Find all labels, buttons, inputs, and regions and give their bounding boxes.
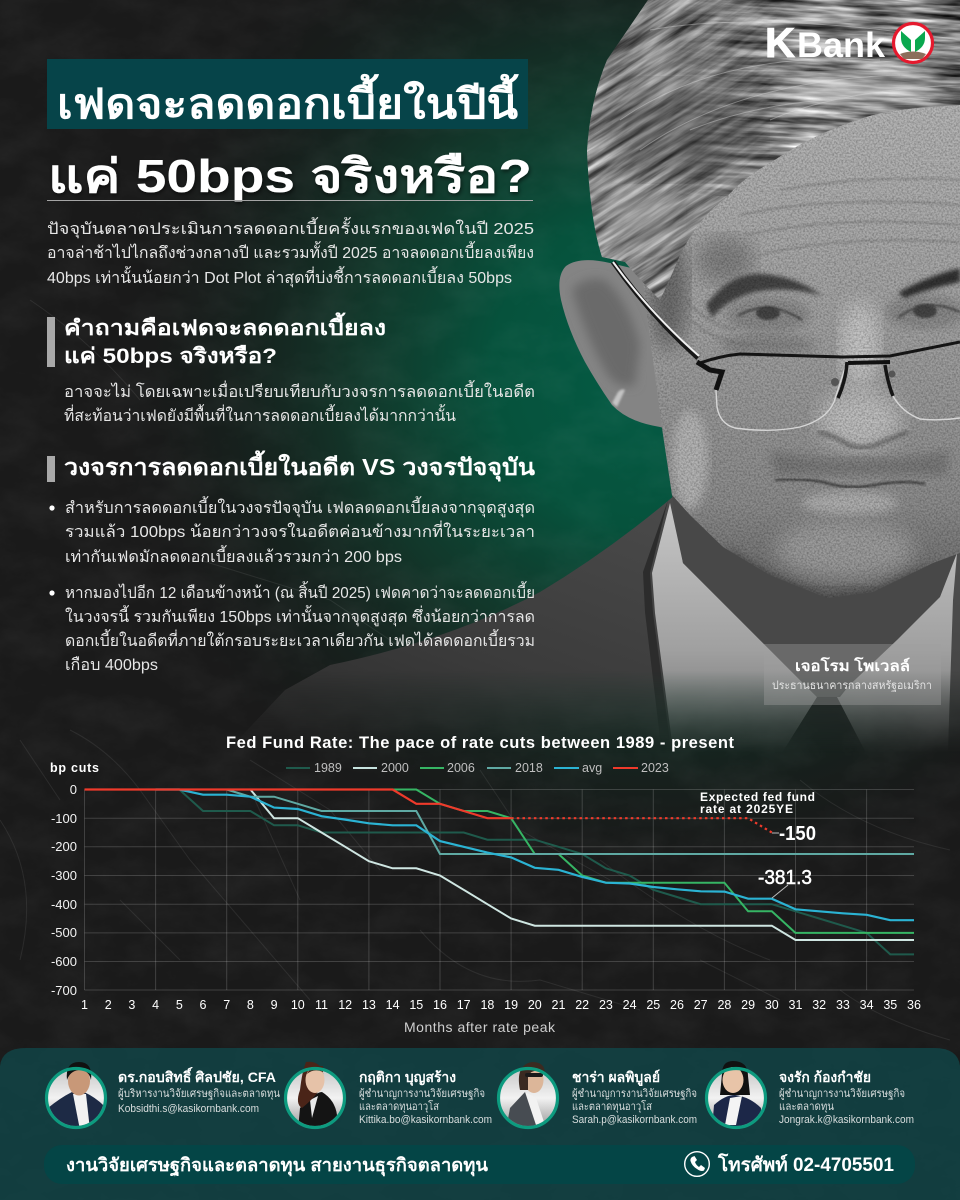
tie [789,697,860,742]
x axis labels: 26 [670,998,684,1012]
bullet 2: ในวงจรนี้ รวมกันเพียง 150bps เท่านั้นจากจุดสูงสุด ซึ่งน้อยกว่าการลด [65,605,535,627]
bullet 2: หากมองไปอีก 12 เดือนข้างหน้า (ณ สิ้นปี 2025) เฟดคาดว่าจะลดดอกเบี้ย [65,581,535,602]
caption: Jerome Powell: เจอโรม โพเวลล์ [795,656,910,675]
analyst 2: และตลาดทุนอาวุโส [359,1099,439,1113]
x axis labels: 19 [504,998,518,1012]
analyst 4: ผู้ชำนาญการงานวิจัยเศรษฐกิจ [779,1088,905,1100]
x axis labels [81,998,921,1012]
bullet 1: รวมแล้ว 100bps น้อยกว่าวงจรในอดีตค่อนข้างมากที่ในระยะเวลา [65,520,535,541]
line: 2006 [393,790,914,933]
legend: 1989 [314,761,342,775]
intro paragraph: 40bps เท่านั้นน้อยกว่า Dot Plot ล่าสุดที่บ่งชี้การลดดอกเบี้ยลง 50bps [47,266,512,288]
neck [664,440,957,697]
y axis labels: -100 [51,811,77,826]
x axis labels: 18 [480,998,494,1012]
bullet 1: สำหรับการลดดอกเบี้ยในวงจรปัจจุบัน เฟดลดดอกเบี้ยลงจากจุดสูงสุด [65,496,535,518]
x axis labels: 13 [362,998,376,1012]
jacket [262,497,960,736]
title: first line on teal banner [47,59,528,129]
avatar 1 [46,1062,106,1130]
line: 2023 expected dotted [511,818,772,832]
analyst 4: และตลาดทุน [779,1101,834,1113]
x axis labels: 30 [765,998,779,1012]
contact pill: โทรศัพท์ 02-4705501 [717,1153,894,1176]
avatar 2 [286,1062,344,1130]
x axis labels: 1 [81,998,88,1012]
contact pill: งานวิจัยเศรษฐกิจและตลาดทุน สายงานธุรกิจตลาดทุน [66,1155,489,1177]
y axis labels: -300 [51,868,77,883]
annotation: expected rate: -150 [779,823,816,845]
x axis labels: 24 [623,998,637,1012]
x axis labels: 22 [575,998,589,1012]
title: second line: แค่ 50bps จริงหรือ? [48,150,532,202]
contact pill [44,1145,915,1184]
x axis title: Months after rate peak [404,1019,556,1035]
x axis labels: 28 [717,998,731,1012]
line: 2023 actual [84,790,511,818]
analyst 3 [498,1062,697,1130]
analyst 4: Jongrak.k@kasikornbank.com [779,1114,914,1126]
x axis labels: 36 [907,998,921,1012]
x axis labels: 32 [812,998,826,1012]
analyst 3: ผู้ชำนาญการงานวิจัยเศรษฐกิจ [572,1088,697,1100]
y axis labels: -700 [51,983,77,998]
legend: 2018 [515,761,543,775]
legend [286,761,669,775]
heading: the question: คำถามคือเฟดจะลดดอกเบี้ยลง [64,312,386,340]
title: first line on teal banner: เฟดจะลดดอกเบี้ยในปีนี้ [57,74,520,127]
intro paragraph: อาจล่าช้าไปไกลถึงช่วงกลางปี และรวมทั้งปี 2025 อาจลดดอกเบี้ยลงเพียง [47,241,534,262]
bullet 2: ดอกเบี้ยในอดีตที่ภายใต้กรอบระยะเวลาเดียวกัน เฟดได้ลดดอกเบี้ยรวม [65,629,535,650]
x axis labels: 10 [291,998,305,1012]
annotation: expected rate: rate at 2025YE [700,802,793,816]
bullet 1: เท่ากันเฟดมักลดดอกเบี้ยลงแล้วรวมกว่า 200 bps [65,545,402,566]
legend: 2000 [381,761,409,775]
x axis labels: 14 [386,998,400,1012]
annotation: average -381.3 [758,867,812,898]
annotation: expected rate [700,790,816,845]
bullet 1 [49,496,535,566]
face [640,80,960,615]
x axis labels: 12 [338,998,352,1012]
y axis labels: -500 [51,925,77,940]
caption: Jerome Powell: ประธานธนาคารกลางสหรัฐอเมริกา [772,679,932,692]
line: average [156,790,914,920]
caption: Jerome Powell [764,644,941,705]
y axis unit: bp cuts [50,761,99,775]
analyst 3: และตลาดทุนอาวุโส [572,1099,652,1113]
chart: fed fund rate pace of cuts [50,734,921,1035]
annotation: average -381.3: -381.3 [758,867,812,889]
line: 2018 [227,790,914,854]
x axis labels: 8 [247,998,254,1012]
icon: KBank seal [894,24,932,62]
analyst 4: จงรัก ก้องกำชัย [779,1069,871,1085]
legend: 2006 [447,761,475,775]
analyst 2: Kittika.bo@kasikornbank.com [359,1114,492,1126]
analyst 1: Kobsidthi.s@kasikornbank.com [118,1103,259,1115]
x axis labels: 6 [200,998,207,1012]
analyst 2: ผู้ชำนาญการงานวิจัยเศรษฐกิจ [359,1088,485,1100]
analyst 4 [706,1061,914,1130]
analyst 2 [286,1062,492,1130]
logo: KBank [765,19,932,66]
answer paragraph [64,380,535,425]
avatar 3 [498,1062,558,1130]
legend: 2023 [641,761,669,775]
face shading [648,230,688,350]
intro paragraph: ปัจจุบันตลาดประเมินการลดดอกเบี้ยครั้งแรกของเฟดในปี 2025 [47,217,534,239]
x axis labels: 33 [836,998,850,1012]
answer paragraph: ที่สะท้อนว่าเฟดยังมีพื้นที่ในการลดดอกเบี้ยลงได้มากกว่านั้น [64,404,456,425]
y axis labels: 0 [70,782,77,797]
x axis labels: 17 [457,998,471,1012]
x axis labels: 5 [176,998,183,1012]
heading: the question: แค่ 50bps จริงหรือ? [64,344,277,368]
glasses [613,262,960,430]
analyst 1: ผู้บริหารงานวิจัยเศรษฐกิจและตลาดทุน [118,1088,280,1100]
x axis labels: 4 [152,998,159,1012]
avatar 4 [706,1061,766,1130]
portrait: Jerome Powell [262,0,960,744]
y axis labels [51,782,77,998]
x axis labels: 25 [646,998,660,1012]
y axis labels: -600 [51,954,77,969]
x axis labels: 34 [860,998,874,1012]
y axis labels: -200 [51,839,77,854]
line: 2000 [250,790,914,940]
analyst 1 [46,1062,280,1130]
shirt collar [652,503,957,740]
annotation: expected rate: Expected fed fund [700,790,815,804]
analyst 3: Sarah.p@kasikornbank.com [572,1114,697,1126]
icon: phone [685,1152,709,1176]
chart title: Fed Fund Rate: The pace of rate cuts between 1989 - present [226,734,734,752]
x axis labels: 29 [741,998,755,1012]
analyst 3: ชาร่า ผลพิบูลย์ [572,1069,660,1086]
y axis labels: -400 [51,897,77,912]
analyst 2: กฤติกา บุญสร้าง [359,1069,456,1086]
x axis labels: 20 [528,998,542,1012]
heading: past cycles vs current: วงจรการลดดอกเบี้ยในอดีต VS วงจรปัจจุบัน [64,450,535,482]
x axis labels: 35 [883,998,897,1012]
logo: KBank: Bank [797,26,886,65]
x axis labels: 15 [409,998,423,1012]
bullet 2 [49,581,535,674]
bullet 2: เกือบ 400bps [65,656,158,674]
line: 1989 [84,790,914,954]
x axis labels: 3 [128,998,135,1012]
analyst 1: ดร.กอบสิทธิ์ ศิลปชัย, CFA [118,1066,276,1085]
x axis labels: 27 [694,998,708,1012]
x axis labels: 16 [433,998,447,1012]
logo: KBank: K [765,19,795,66]
x axis labels: 9 [271,998,278,1012]
x axis labels: 31 [789,998,802,1012]
intro paragraph [47,217,534,288]
x axis labels: 23 [599,998,613,1012]
legend: avg [582,761,602,775]
hair [587,0,960,300]
x axis labels: 2 [105,998,112,1012]
x axis labels: 7 [223,998,230,1012]
x axis labels: 11 [315,998,328,1012]
heading: the question [47,312,386,368]
answer paragraph: อาจจะไม่ โดยเฉพาะเมื่อเปรียบเทียบกับวงจรการลดดอกเบี้ยในอดีต [64,380,535,401]
ear [559,260,672,430]
footer panel [0,1048,960,1200]
x axis labels: 21 [552,998,565,1012]
